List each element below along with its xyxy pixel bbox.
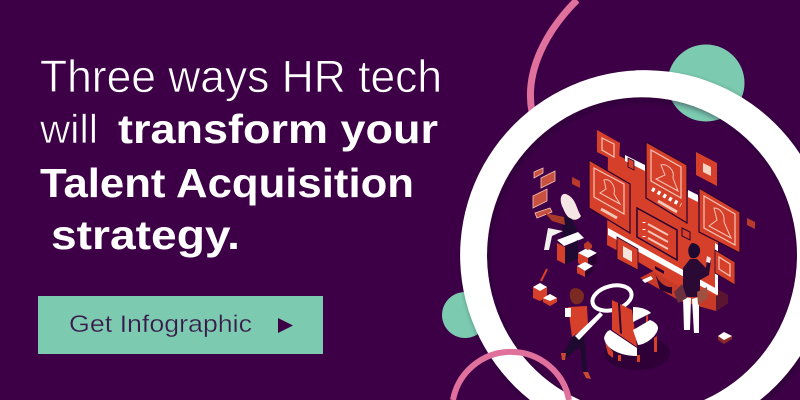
card left — [589, 160, 630, 233]
headline — [39, 51, 442, 258]
button — [38, 296, 323, 354]
form card — [637, 208, 677, 260]
headline: will — [39, 106, 98, 152]
illustration — [533, 130, 755, 379]
button: Get Infographic — [69, 311, 252, 338]
headline: transform your — [118, 106, 438, 152]
detective with magnifying glass — [561, 281, 634, 379]
monitor — [607, 150, 728, 311]
mint circle bottom — [442, 292, 488, 338]
mint circle top — [668, 44, 744, 122]
woman seated — [544, 194, 584, 265]
boxes — [533, 241, 732, 344]
pink arc top — [530, 0, 577, 112]
headline: Talent Acquisition — [40, 160, 414, 206]
headline: strategy. — [51, 212, 240, 258]
pie chart — [604, 300, 670, 370]
card right — [699, 188, 740, 253]
card center — [646, 142, 687, 223]
chat bubbles — [533, 168, 555, 218]
pink ring bottom — [453, 352, 569, 400]
small cards — [572, 130, 755, 285]
white ring — [460, 70, 800, 400]
man standing — [674, 243, 711, 333]
headline: Three ways HR tech — [40, 51, 442, 102]
